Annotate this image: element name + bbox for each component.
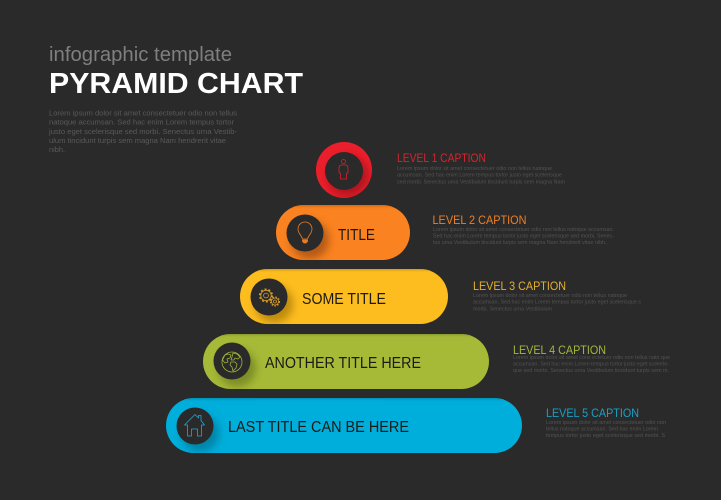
- level 3 caption: Lorem ipsum dolor sit amet consectetuer odio non tellus natoque: [473, 293, 627, 299]
- icon: person: [339, 160, 348, 179]
- level 2 caption: [432, 215, 614, 246]
- level 1 caption: [397, 153, 566, 186]
- level 2 caption: tus urna Vestibulum tincidunt turpis sem magna Nam hendrerit vitae nibh..: [433, 240, 608, 246]
- level 3 caption: [473, 281, 641, 312]
- level 3 caption: accumsan. Sed hac enim Lorem tempus tortor justo eget scelerisque s: [473, 300, 641, 306]
- level 2 caption: LEVEL 2 CAPTION: [432, 215, 526, 227]
- intro text: Lorem ipsum dolor sit amet consectetuer odio non tellus: [49, 108, 237, 118]
- level 4: green pill: [197, 331, 495, 389]
- level 2 caption: Sed hac enim Lorem tempus tortor justo eget scelerisque sed morbi. Senec-: [433, 234, 614, 240]
- subtitle: infographic template: [49, 44, 232, 66]
- level 4 caption: que sed morbi. Senectus urna Vestibulum tincidunt turpis sem m.: [513, 368, 669, 374]
- intro text: natoque accumsan. Sed hac enim Lorem tempus tortor: [49, 118, 235, 126]
- level 5 caption: tellus natoque accumsan. Sed hac enim Lorem: [546, 426, 659, 432]
- level 1 caption: accumsan. Sed hac enim Lorem tempus tortor justo eget scelerisque: [397, 172, 562, 178]
- label: ANOTHER TITLE HERE: [265, 355, 421, 372]
- icon: light bulb: [298, 222, 312, 243]
- level 5 caption: LEVEL 5 CAPTION: [546, 408, 639, 420]
- label: LAST TITLE CAN BE HERE: [228, 419, 409, 436]
- level 1 caption: Lorem ipsum dolor sit amet consectetuer odio non tellus natoque: [397, 166, 552, 172]
- level 2: orange pill: [276, 205, 410, 260]
- intro text: nibh.: [49, 145, 65, 154]
- level 5 caption: tempus tortor justo eget scelerisque sed morbi. S: [546, 433, 665, 439]
- intro text: justo eget scelerisque sed morbi. Senectus urna Vestib-: [48, 127, 238, 136]
- level 4 caption: Lorem ipsum dolor sit amet cons ectetuer odio non tellus nato que: [513, 355, 670, 361]
- level 4 caption: [513, 345, 670, 374]
- level 4 caption: LEVEL 4 CAPTION: [513, 345, 606, 357]
- icon: globe: [222, 352, 242, 372]
- level 2 caption: Lorem ipsum dolor sit amet consectetuer odio non tellus natoque accumsan.: [433, 227, 614, 233]
- level 5 caption: Lorem ipsum dolor sit amet consectetuer odio non: [546, 420, 666, 426]
- level 3 caption: LEVEL 3 CAPTION: [473, 281, 566, 293]
- level 1: red circle: [316, 142, 372, 198]
- level 3: yellow pill: [240, 269, 448, 324]
- intro text: [48, 108, 238, 154]
- icon: gears: [260, 289, 279, 306]
- level 3 caption: morbi. Senectus urna Vestibulum: [473, 306, 553, 312]
- heading block: [48, 44, 303, 154]
- level 1 caption: LEVEL 1 CAPTION: [397, 153, 486, 165]
- label: TITLE: [338, 227, 375, 244]
- level 1 caption: sed morbi. Senectus urna Vestibulum tincidunt turpis sem magna Nam: [397, 180, 566, 186]
- title: PYRAMID CHART: [49, 68, 303, 100]
- level 4 caption: accumsan. Sed hac enim Lorem tempus tortor justo eget scelerle-: [513, 362, 669, 368]
- icon: house: [184, 414, 204, 436]
- level 5: blue pill: [160, 395, 528, 453]
- intro text: ulum tincidunt turpis sem magna Nam hendrerit vitae: [49, 136, 226, 145]
- label: SOME TITLE: [302, 291, 386, 308]
- level 5 caption: [546, 408, 666, 439]
